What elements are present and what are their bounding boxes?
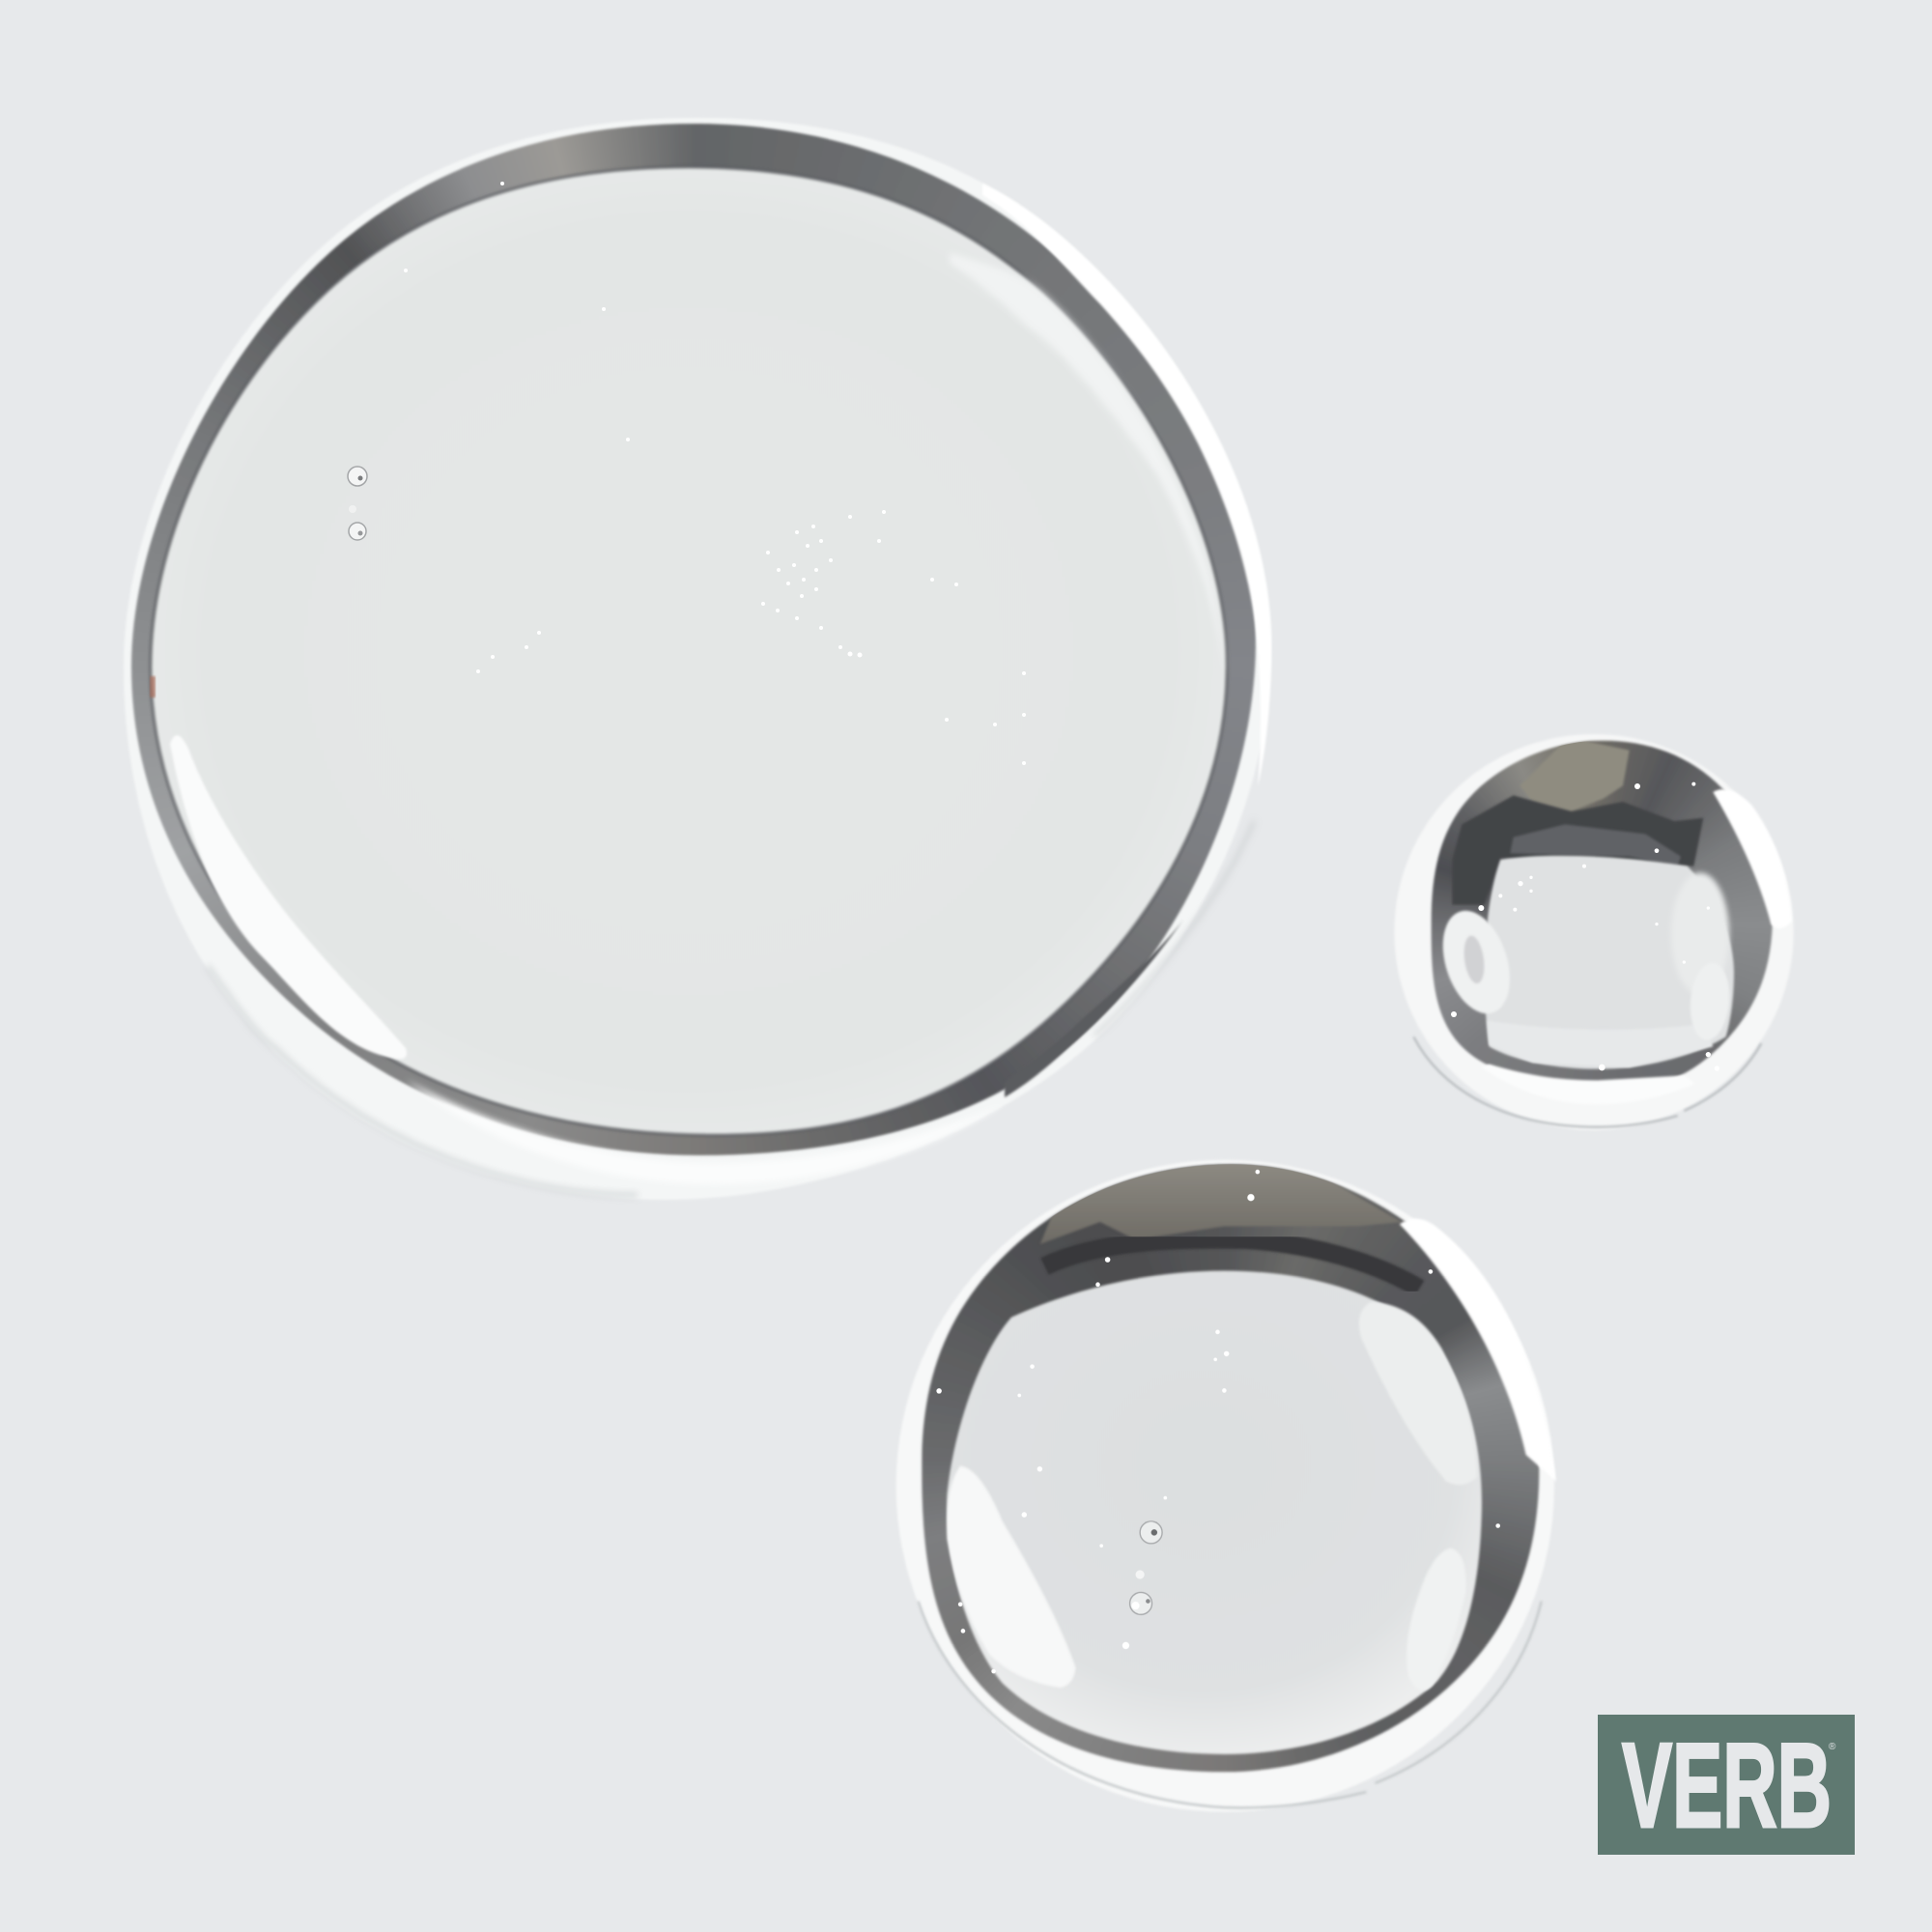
small droplet dark band: [1452, 795, 1703, 905]
medium droplet lower-right oval: [1406, 1548, 1466, 1690]
small droplet dark ring: [1427, 737, 1777, 1094]
medium droplet upper-right oval: [1359, 1302, 1477, 1485]
small droplet lower rim lines: [1413, 1037, 1761, 1127]
small droplet lower interior glow: [1488, 1021, 1713, 1067]
large droplet: [97, 97, 1294, 1200]
medium droplet lower rim lines: [919, 1602, 1542, 1807]
large droplet bubbles: [348, 467, 367, 540]
medium droplet: [896, 1157, 1556, 1812]
large droplet lower lip: [406, 1080, 1005, 1184]
large droplet lower-right thick rim: [1005, 920, 1183, 1097]
large droplet dark ring: [97, 97, 1294, 1179]
medium droplet bubbles: [1130, 1521, 1162, 1614]
small droplet halo: [1394, 734, 1794, 1130]
medium droplet interior: [947, 1270, 1482, 1754]
large droplet interior: [151, 167, 1227, 1135]
logo: VERB: [1598, 1715, 1855, 1855]
medium droplet halo: [896, 1160, 1554, 1812]
small droplet lower-right oval: [1688, 961, 1732, 1041]
medium droplet sparkles: [936, 1170, 1500, 1673]
large droplet halo: [124, 118, 1271, 1200]
small droplet left oval: [1431, 902, 1521, 1022]
small droplet right interior glow: [1671, 872, 1729, 995]
small droplet: [1394, 734, 1794, 1130]
large droplet lower-left crescent: [170, 735, 407, 1059]
large droplet upper-right highlight: [982, 184, 1271, 787]
medium droplet left white oval: [947, 1465, 1076, 1688]
medium droplet dark band: [1044, 1239, 1419, 1289]
small droplet top reflection: [1536, 741, 1631, 810]
small droplet sparkles: [1451, 782, 1719, 1071]
large droplet orange speck: [150, 676, 156, 697]
medium droplet top reflection: [1040, 1157, 1402, 1244]
small droplet upper-right highlight: [1713, 789, 1792, 928]
logo registered mark: ®: [1829, 1742, 1836, 1752]
large droplet faint upper-right crescent: [950, 253, 1225, 676]
logo background: [1598, 1715, 1855, 1855]
small droplet bottom lip: [1481, 1065, 1695, 1104]
large droplet lower rim lines: [208, 821, 1254, 1195]
large droplet sparkles: [404, 182, 1026, 765]
medium droplet upper-right white highlight: [1400, 1219, 1556, 1482]
small droplet interior: [1485, 856, 1734, 1069]
small droplet grey band: [1510, 824, 1681, 867]
medium droplet dark ring: [914, 1157, 1548, 1778]
